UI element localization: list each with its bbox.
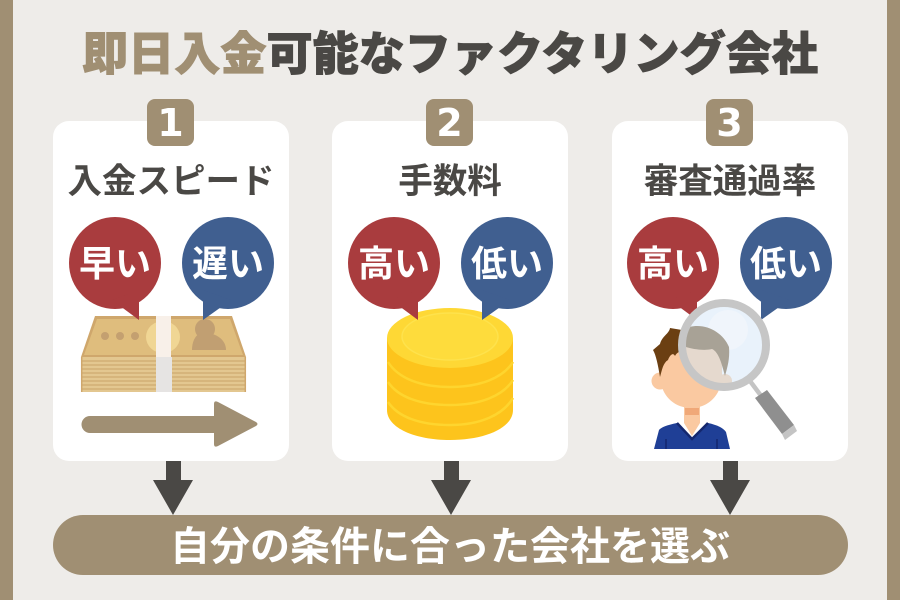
bubble: fast: 早い — [79, 243, 151, 284]
bubble: low — [740, 217, 832, 320]
conclusion banner: 自分の条件に合った会社を選ぶ — [170, 525, 730, 569]
panel: approval rate — [612, 99, 848, 461]
badge 2: 2 — [436, 101, 463, 145]
arrow: down 2 — [431, 461, 471, 515]
heading: speed: 入金スピード — [68, 163, 274, 201]
arrow: down 1 — [153, 461, 193, 515]
heading: fee: 手数料 — [398, 163, 502, 201]
panel: fee — [332, 99, 568, 461]
bubble: fast — [69, 217, 161, 320]
arrow: right — [82, 401, 258, 447]
panel: speed — [53, 99, 289, 461]
title: 即日入金可能なファクタリング会社 — [82, 18, 818, 84]
bubble: high — [627, 217, 719, 320]
bubble: high: 高い — [637, 243, 709, 284]
icon: person — [652, 326, 732, 449]
icon: magnifying glass — [678, 299, 797, 440]
bubble: high: 高い — [358, 243, 430, 284]
badge 3: 3 — [716, 101, 743, 145]
heading: approval rate: 審査通過率 — [644, 163, 816, 201]
badge 2 — [426, 99, 473, 146]
icon: coin stack — [387, 308, 513, 440]
bubble: low: 低い — [750, 243, 822, 284]
bubble: slow — [182, 217, 274, 320]
bubble: slow: 遅い — [192, 243, 264, 284]
icon: banknote bundle — [81, 316, 246, 392]
badge 3 — [706, 99, 753, 146]
arrow: down 3 — [710, 461, 750, 515]
bubble: low — [461, 217, 553, 320]
badge 1: 1 — [157, 101, 184, 145]
conclusion banner — [53, 515, 848, 575]
bubble: low: 低い — [471, 243, 543, 284]
badge 1 — [147, 99, 194, 146]
bubble: high — [348, 217, 440, 320]
